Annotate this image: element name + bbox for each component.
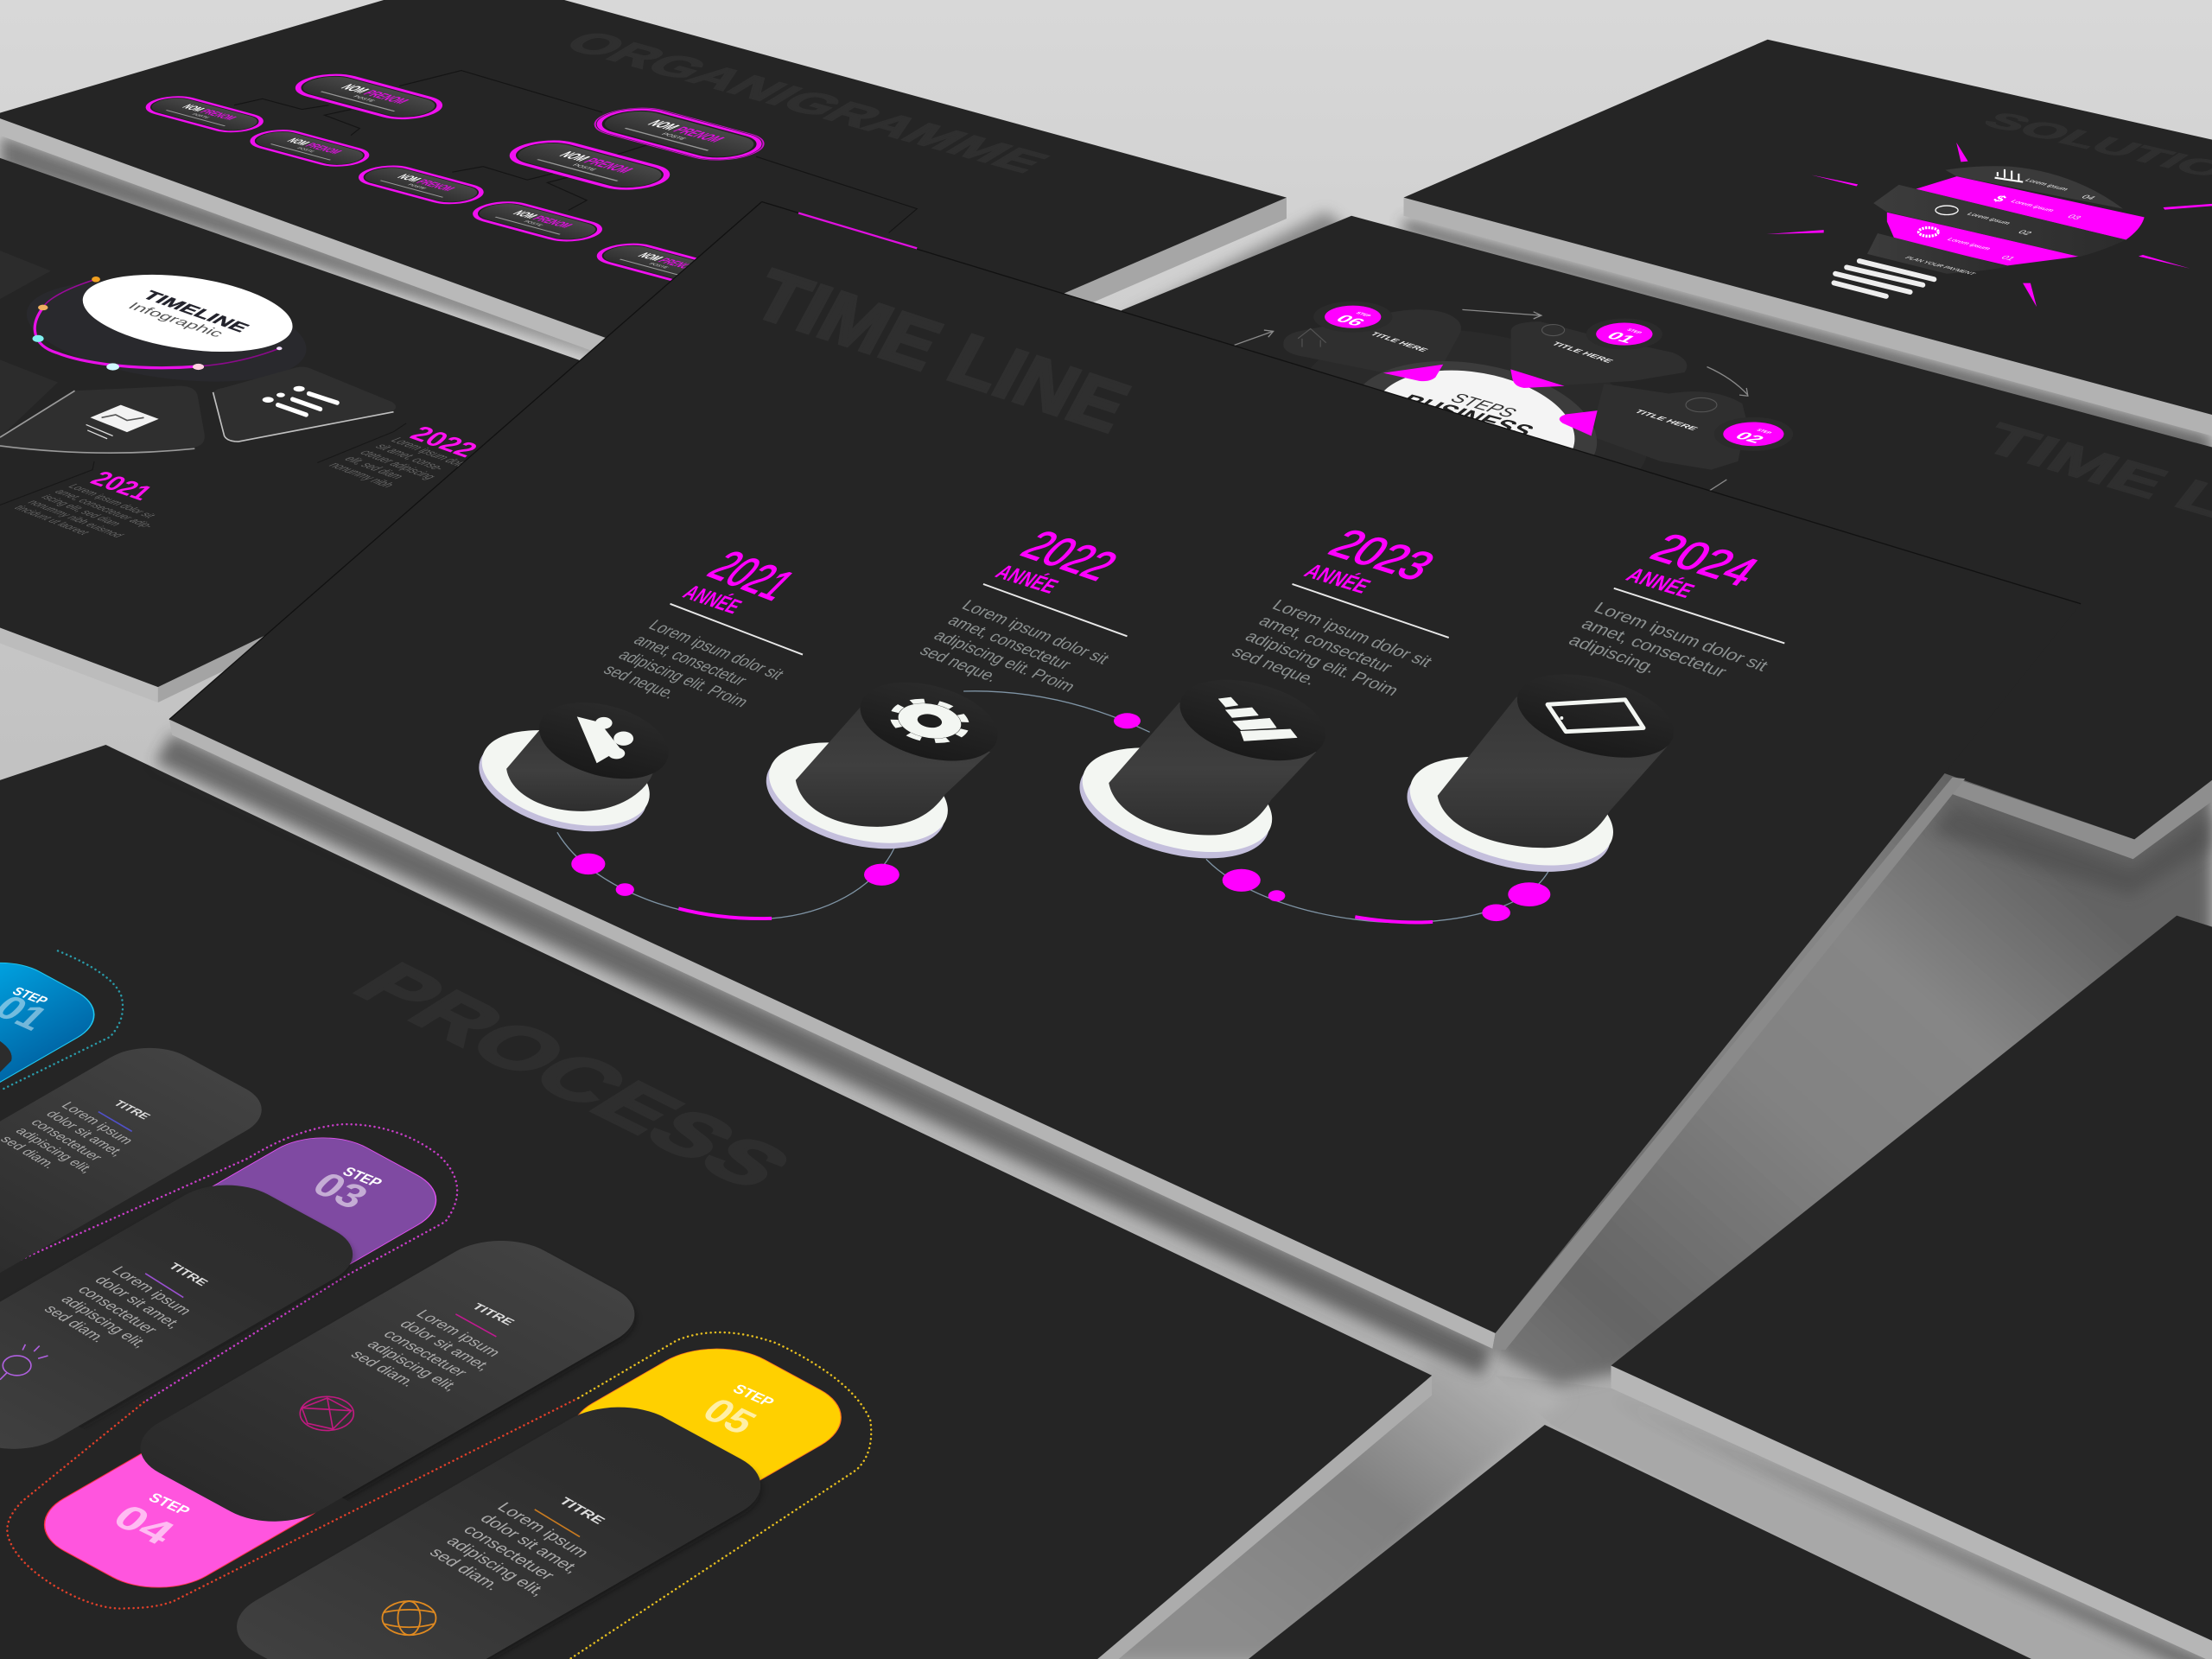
step 02 card: consectetuer (27, 1116, 106, 1163)
chart: light bulb: 03 (2064, 213, 2083, 221)
org node: fourth row: POSTE (522, 220, 543, 227)
panel: solution slide (1403, 40, 2212, 459)
step 01 tab: STEP (9, 985, 51, 1007)
label: 2021 small: 2021 (84, 467, 158, 505)
connectors: org chart (234, 71, 917, 232)
org node: right top: NOM PRENOM (643, 118, 728, 144)
org node: right top: POSTE (659, 132, 688, 141)
step tile: 02 (1594, 384, 1793, 470)
arrows: step cycle (1235, 309, 1748, 491)
chart: light bulb: PLAN YOUR PAYMENT (1903, 256, 1978, 276)
step 03 card: Lorem ipsum (108, 1264, 196, 1317)
column: 2023: adipiscing elit. Proim (1241, 628, 1402, 699)
tile: list icon (213, 366, 396, 442)
org node: second row: POSTE (296, 147, 315, 153)
centre circle: steps business (1341, 343, 1607, 509)
column: 2022: ANNÉE (991, 560, 1064, 597)
step 03 tab: STEP (339, 1165, 385, 1190)
org node: fifth row: POSTE (647, 263, 669, 270)
heading: organigramme: ORGANIGRAMME (553, 25, 1060, 178)
step 05 card (209, 1392, 788, 1659)
arc with milestone dots (33, 276, 283, 371)
step 03 tab (108, 1123, 462, 1323)
column: 2021: adipiscing elit. Proim (614, 646, 753, 710)
connectors: years (0, 423, 406, 505)
step tile: 01 (1511, 319, 1687, 385)
step 03 card (0, 1172, 377, 1466)
column: 2024: 2024 (1641, 525, 1768, 595)
chart: light bulb: 04 (2079, 194, 2098, 201)
step 05 card: Lorem ipsum (493, 1500, 594, 1560)
centre circle: steps business: BUSINESS (1395, 391, 1540, 440)
curve: lower link 2021-2022 (557, 832, 899, 919)
text: 2022 small body: elit, sed diam (340, 454, 408, 480)
org node: right second: POSTE (570, 163, 599, 172)
step 01 tab (0, 950, 118, 1127)
org node: left: NOM PRENOM (179, 103, 239, 122)
column: 2021: sed neque. (600, 661, 681, 702)
heading: time line: TIME LINE (741, 255, 1142, 448)
org node: fifth row: NOM PRENOM (634, 251, 702, 272)
column: 2023: sed neque. (1228, 644, 1320, 689)
cylinder 1 with people icon (468, 690, 677, 849)
column: 2022: 2022 (1011, 522, 1128, 589)
column: 2021: 2021 (697, 542, 806, 609)
text: 2021 small body: tincidunt ut laoreet (11, 504, 93, 537)
dotted route (0, 950, 871, 1659)
text: 2022 small body: nonummy nibh (326, 461, 398, 489)
curve: lower link 2023-2024 (1206, 859, 1550, 923)
chart: light bulb (1767, 143, 2212, 307)
step tile: 02: STEP (1755, 429, 1772, 435)
panel: business steps slide (1086, 212, 2212, 859)
cylinder 4 with tablet icon (1395, 659, 1683, 892)
step 05 tab: 05 (694, 1391, 766, 1441)
panel: process slide (0, 745, 1432, 1659)
icon: network globe (300, 1396, 353, 1431)
org node: fourth row: NOM PRENOM (510, 209, 576, 229)
chart: light bulb: Lorem ipsum (2009, 199, 2057, 213)
panel: bottom centre blank slide (1249, 1425, 2031, 1659)
shadow under main slide (156, 734, 1492, 1376)
tile: chart icon (0, 386, 205, 453)
step 02 card: TITRE (111, 1098, 154, 1121)
step 03 card: sed diam. (40, 1302, 111, 1344)
step 05 tab (543, 1332, 870, 1516)
text: 2021 small body: amet, consectetuer adip- (52, 488, 157, 530)
chart: light bulb: Lorem ipsum (1965, 212, 2013, 226)
step tile: 01: STEP (1625, 328, 1643, 334)
chart: light bulb: $ (1989, 194, 2011, 204)
icon: gear (887, 694, 973, 747)
column: 2023 (1228, 521, 1449, 717)
step tile: 06 (1283, 302, 1461, 372)
step 03 card: adipiscing elit, (57, 1293, 151, 1350)
column: 2021: Lorem ipsum dolor sit (645, 617, 789, 683)
text: 2021 small body: iscing elit, sed diam (38, 493, 124, 527)
step tile: 02: TITLE HERE (1632, 409, 1700, 432)
column: 2021 (600, 542, 806, 728)
step 04 card: dolor sit amet, (396, 1318, 495, 1373)
chart: light bulb: 02 (2015, 229, 2034, 237)
org node: top centre: NOM PRENOM (336, 83, 412, 105)
step 04 card: consectetuer (379, 1328, 471, 1379)
column: 2024: Lorem ipsum dolor sit (1590, 599, 1772, 675)
panel: bottom right blank slide (1608, 916, 2212, 1659)
column: 2022: adipiscing elit. Proim (930, 627, 1078, 696)
column: 2024: adipiscing. (1565, 632, 1661, 677)
panel: organigramme slide (0, 0, 1287, 426)
org node: third row: NOM PRENOM (394, 173, 458, 193)
cylinder 2 with gear icon (755, 669, 1007, 867)
column: 2022: Lorem ipsum dolor sit (957, 598, 1113, 668)
centre circle: timeline infographic: TIMELINE (138, 288, 254, 334)
step tile: 01: 01 (1602, 329, 1641, 345)
column: 2024 (1565, 525, 1784, 708)
step 05 tab: STEP (729, 1382, 779, 1409)
cylinder 3 with bars icon (1068, 665, 1334, 877)
centre circle: timeline infographic: Infographic (124, 301, 227, 340)
org node: top centre (285, 71, 453, 123)
step 02 card: adipiscing elit, (12, 1125, 97, 1175)
step 04 card: sed diam. (346, 1348, 420, 1389)
tiles: left partial (0, 251, 58, 437)
centre circle: timeline infographic (78, 263, 297, 364)
org node: left (137, 93, 272, 135)
step 03 tab: 03 (303, 1165, 378, 1216)
step 02 card: Lorem ipsum (58, 1100, 137, 1147)
column: 2023: amet, consectetur (1255, 613, 1396, 677)
step 04 tab (17, 1413, 355, 1603)
org node: fifth row (588, 240, 739, 288)
step tile: 06: STEP (1354, 312, 1371, 318)
column: 2023: Lorem ipsum dolor sit (1268, 597, 1436, 671)
column: 2023: 2023 (1319, 521, 1445, 589)
step 03 card: dolor sit amet, (91, 1274, 186, 1331)
step 05 card: consectetuer (459, 1522, 559, 1583)
column: 2021: amet, consectetur (630, 632, 752, 689)
org node: fourth row (463, 199, 612, 245)
org node: right second: NOM PRENOM (555, 150, 636, 175)
icon: tablet (1548, 700, 1643, 732)
column: 2021: ANNÉE (678, 581, 747, 618)
column: 2022 (916, 522, 1128, 713)
org node: third row (350, 162, 493, 207)
icon: light bulb (0, 1344, 48, 1380)
centre circle: steps business: STEPS (1446, 391, 1522, 420)
step 04 tab: 04 (104, 1497, 184, 1552)
text: 2022 small body: sit amet, conse- (372, 442, 450, 472)
org node: second row: NOM PRENOM (283, 137, 346, 156)
column: 2022: sed neque. (916, 643, 1001, 686)
step tile: 06: 06 (1332, 313, 1370, 328)
text: 2022 small body: Lorem ipsum dolor (387, 435, 476, 470)
step tile: 01: TITLE HERE (1549, 341, 1615, 364)
icon: orange globe (382, 1601, 435, 1635)
chart: light bulb: 01 (1999, 255, 2018, 262)
step tile: 06: TITLE HERE (1368, 331, 1430, 353)
chart: light bulb: Lorem ipsum (1945, 237, 1993, 251)
step 03 card: TITRE (165, 1261, 211, 1288)
org node: second row (242, 127, 378, 169)
column: 2024: ANNÉE (1621, 563, 1700, 602)
curve: upper link 2022-2023 (963, 691, 1150, 732)
label: 2022 small: 2022 (404, 422, 484, 462)
magenta edge line (798, 213, 917, 248)
org node: right top (578, 103, 780, 166)
heading: process: PROCESS (334, 952, 810, 1200)
step 05 card: dolor sit amet, (476, 1511, 583, 1576)
org node: top centre: POSTE (352, 95, 377, 103)
text: 2022 small body: ctetuer adipiscing (356, 448, 441, 480)
column: 2022: amet, consectetur (944, 613, 1075, 673)
panel: main time line slide (169, 201, 2081, 1350)
org node: left: POSTE (190, 113, 211, 119)
org node: right second (498, 137, 682, 194)
icon: people (577, 716, 633, 763)
step 04 card: TITRE (468, 1301, 518, 1327)
chart: light bulb: Lorem ipsum (2023, 177, 2071, 192)
step 03 card: consectetuer (74, 1283, 162, 1336)
step 04 card (115, 1226, 660, 1540)
step 02 card: dolor sit amet, (42, 1109, 127, 1159)
step 04 tab: STEP (145, 1490, 194, 1518)
step 05 card: adipiscing elit, (442, 1534, 550, 1599)
column: 2023: ANNÉE (1299, 559, 1376, 598)
step tile: 02: 02 (1731, 429, 1769, 445)
step 04 card: adipiscing elit, (363, 1338, 462, 1393)
icon: bars (1218, 697, 1297, 741)
text: 2021 small body: nonummy nibh euismod (24, 499, 127, 539)
text: 2021 small body: Lorem ipsum dolor sit (65, 483, 159, 519)
org node: third row: POSTE (406, 184, 427, 190)
step 05 card: sed diam. (425, 1545, 505, 1593)
panel: timeline infographic slide (0, 158, 705, 702)
step 02 card (0, 1036, 283, 1296)
step 05 card: TITRE (556, 1495, 609, 1526)
step 04 card: Lorem ipsum (412, 1307, 505, 1359)
column: 2024: amet, consectetur (1578, 615, 1731, 681)
